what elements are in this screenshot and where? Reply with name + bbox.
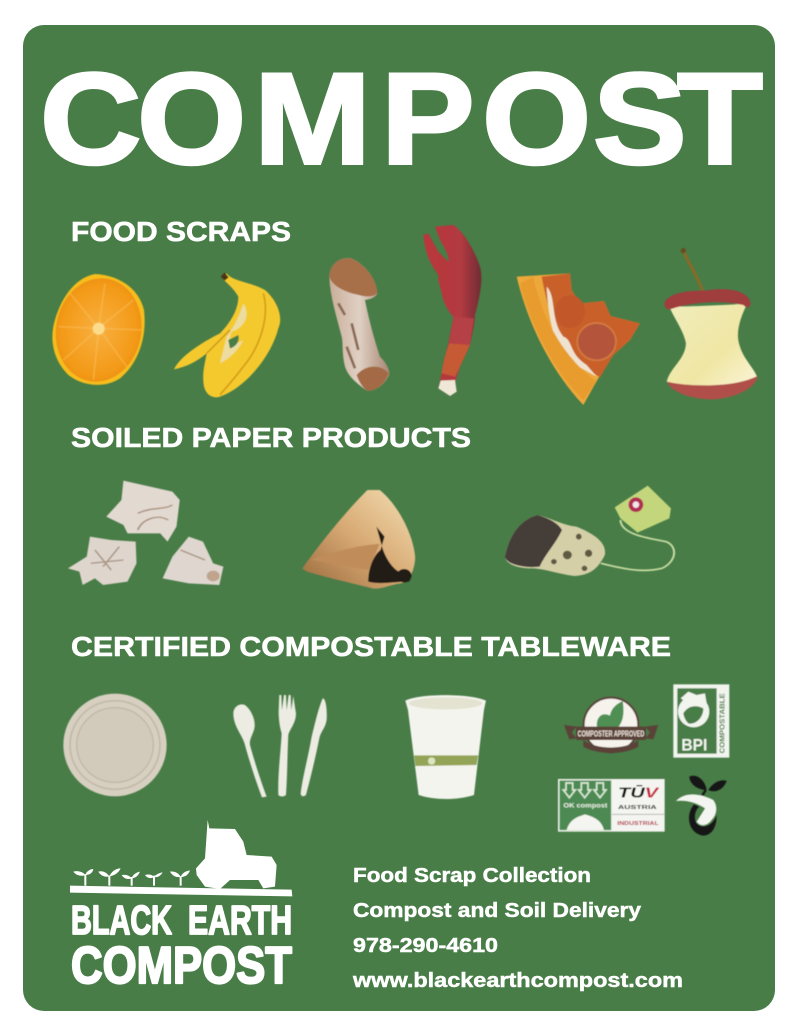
icon: compostable cup (405, 695, 486, 799)
website: www.blackearthcompost.com (352, 970, 683, 992)
icon: crumpled tissues (68, 481, 223, 585)
heading: certified compostable tableware: CERTIFIED COMPOSTABLE TABLEWARE (71, 631, 671, 662)
company logo: Black Earth Compost (70, 820, 292, 995)
icon: OK compost TUV logo: TŪV (618, 785, 660, 802)
icon: pizza slice (517, 273, 640, 405)
icon: OK compost TUV logo: INDUSTRIAL (617, 821, 659, 827)
icon: OK compost TUV logo (558, 779, 665, 832)
icon: seedling logo (676, 776, 727, 836)
tableware row (63, 694, 486, 799)
icon: lobster claw (423, 225, 481, 396)
logo text: Compost: COMPOST (71, 937, 292, 995)
icon: tea bag (505, 486, 674, 576)
service: food scrap collection: Food Scrap Collection (353, 865, 591, 887)
icon: BPI compostable logo: COMPOSTABLE (719, 693, 726, 753)
contact details (352, 865, 683, 992)
icon: BPI compostable logo: BPI (681, 735, 707, 754)
service: compost and soil delivery: Compost and Soil Delivery (353, 900, 642, 922)
icon: BPI compostable logo (673, 684, 729, 758)
icon: cutlery (233, 695, 327, 797)
icon: tractor and seedlings (70, 820, 292, 896)
logo text: Black Earth: EARTH (188, 897, 292, 943)
icon: composter approved seal (564, 698, 658, 753)
icon: orange slice (48, 271, 150, 389)
icon: coffee filter (302, 490, 415, 589)
icon: OK compost TUV logo: OK compost (563, 803, 608, 810)
logo text: Black Earth (71, 897, 292, 943)
title: COMPOST (40, 46, 763, 191)
icon: fiber plate (63, 694, 167, 796)
icon: composter approved seal: COMPOSTER APPROVED (578, 729, 644, 738)
icon: apple core (664, 248, 757, 399)
food scraps row (48, 225, 757, 405)
heading: food scraps: FOOD SCRAPS (71, 216, 291, 247)
icon: chicken bone (329, 258, 389, 391)
icon: OK compost TUV logo: AUSTRIA (618, 805, 657, 811)
heading: soiled paper products: SOILED PAPER PRODUCTS (71, 422, 471, 453)
logo text: Black Earth: BLACK (71, 897, 172, 943)
icon: banana peel (174, 273, 280, 397)
phone number: 978-290-4610 (353, 935, 498, 957)
certification logos (558, 684, 729, 836)
soiled paper row (68, 481, 674, 589)
